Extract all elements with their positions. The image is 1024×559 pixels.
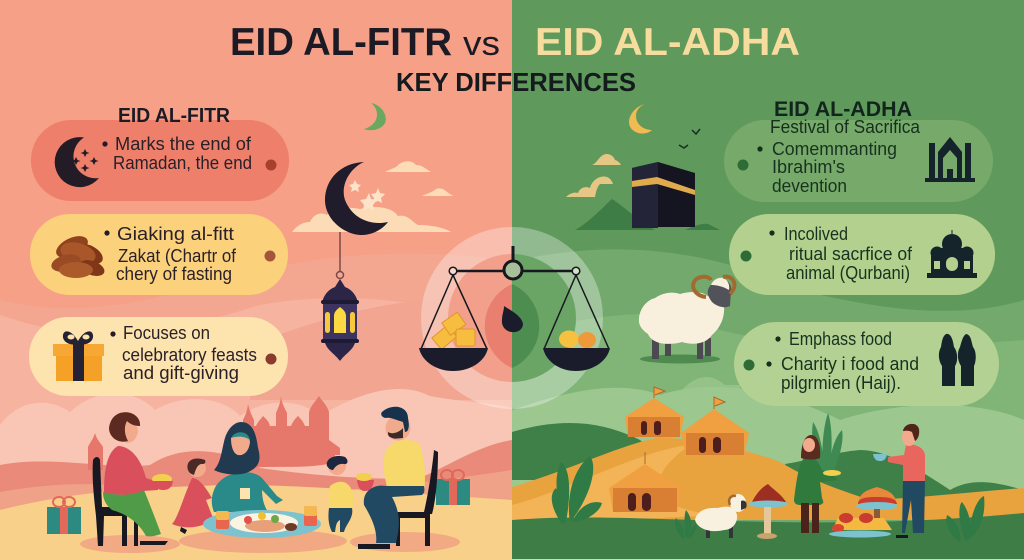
clouds near Kaaba xyxy=(566,154,621,197)
gift right xyxy=(436,470,470,505)
gold blocks xyxy=(432,312,475,350)
card: festival of sacrifice: Comemmanting xyxy=(772,139,897,159)
heading: Eid al-Adha and festival subtitle: EID AL-ADHA xyxy=(774,98,912,121)
icon: pilgrims xyxy=(939,334,976,386)
heading: Eid al-Adha and festival subtitle xyxy=(770,98,921,137)
gift left xyxy=(47,497,81,534)
card: festival of sacrifice xyxy=(724,120,993,202)
center drop xyxy=(502,306,523,332)
panel: Eid al-Adha points xyxy=(724,120,999,406)
round sweets xyxy=(559,330,596,348)
left pan xyxy=(419,348,488,371)
card: end of Ramadan xyxy=(31,120,289,201)
card: feasts and gifts: Focuses on xyxy=(123,323,210,343)
balance scale xyxy=(419,246,610,371)
clouds by crescent xyxy=(292,161,453,232)
pink city skyline xyxy=(88,396,340,470)
card: festival of sacrifice: devention xyxy=(772,176,847,196)
left background scene xyxy=(0,0,512,559)
desert plants xyxy=(552,456,984,542)
small green crescent xyxy=(364,103,386,130)
green clouds behind tents xyxy=(548,377,1024,460)
card: ritual sacrifice: animal (Qurbani) xyxy=(786,263,910,283)
child in red dress xyxy=(172,458,213,534)
card: ritual sacrifice xyxy=(729,214,995,295)
right background scene xyxy=(512,0,1024,559)
main title: EID AL-ADHA xyxy=(535,21,800,64)
main title xyxy=(230,21,800,64)
hanging lantern xyxy=(321,232,359,361)
orange tents xyxy=(609,387,749,512)
card: Zakat xyxy=(30,214,288,295)
family feast scene xyxy=(47,407,470,553)
card: end of Ramadan: Marks the end of xyxy=(115,134,252,154)
main title: vs xyxy=(463,25,500,63)
card: Zakat: Giaking al-fitt xyxy=(117,224,234,244)
tall cactus xyxy=(812,413,843,482)
tent 2 xyxy=(681,397,749,455)
card: end of Ramadan: Ramadan, the end xyxy=(113,153,252,173)
dates stand xyxy=(748,484,788,539)
yellow crescent moon xyxy=(629,104,652,134)
card: Zakat: Zakat (Chartr of xyxy=(118,246,237,266)
panel: Eid al-Fitr points xyxy=(29,120,289,396)
food stands xyxy=(748,484,898,539)
ground shadows xyxy=(80,529,460,553)
card: charity and pilgrimage: Charity i food and xyxy=(781,354,919,374)
large ram xyxy=(639,277,734,364)
right pan xyxy=(543,348,610,371)
boy xyxy=(327,456,353,532)
icon: mosque gate xyxy=(925,137,975,182)
woman serving food xyxy=(794,435,841,533)
icon: crescent and stars xyxy=(55,137,99,187)
card: feasts and gifts xyxy=(29,317,288,396)
card: feasts and gifts: celebratory feasts xyxy=(122,345,257,365)
card: feasts and gifts: and gift-giving xyxy=(123,363,239,383)
icon: dates xyxy=(49,232,107,279)
woman on chair xyxy=(93,412,173,546)
birds xyxy=(679,129,700,148)
card: ritual sacrifice: ritual sacrfice of xyxy=(789,244,913,264)
pastry stand xyxy=(856,487,898,519)
main title: EID AL-FITR xyxy=(230,21,452,64)
small sheep xyxy=(695,494,747,538)
icon: gift box xyxy=(53,331,104,381)
icon: domed mosque xyxy=(927,230,977,278)
woman in hijab xyxy=(212,422,283,512)
tent 3 xyxy=(609,452,681,512)
large crescent and stars xyxy=(325,162,388,235)
food platter xyxy=(203,506,321,538)
card: festival of sacrifice: Ibrahim's xyxy=(772,157,845,177)
sweets platter xyxy=(829,513,892,538)
tent 1 xyxy=(625,387,684,437)
card: ritual sacrifice: Incolived xyxy=(784,224,848,244)
card: charity and pilgrimage: Emphass food xyxy=(789,329,892,349)
green hills under Kaaba xyxy=(575,199,720,230)
heading: Eid al-Adha and festival subtitle: Festival of Sacrifica xyxy=(770,117,921,137)
card: Zakat: chery of fasting xyxy=(116,264,232,284)
Kaaba xyxy=(632,162,695,228)
card: charity and pilgrimage: pilgrmien (Haij). xyxy=(781,373,901,393)
heading: Eid al-Fitr: EID AL-FITR xyxy=(118,105,231,127)
man on chair xyxy=(356,407,438,549)
center scale glow xyxy=(421,227,603,409)
card: charity and pilgrimage xyxy=(734,322,999,406)
man serving food xyxy=(873,424,925,538)
subtitle: KEY DIFFERENCES xyxy=(396,67,636,97)
